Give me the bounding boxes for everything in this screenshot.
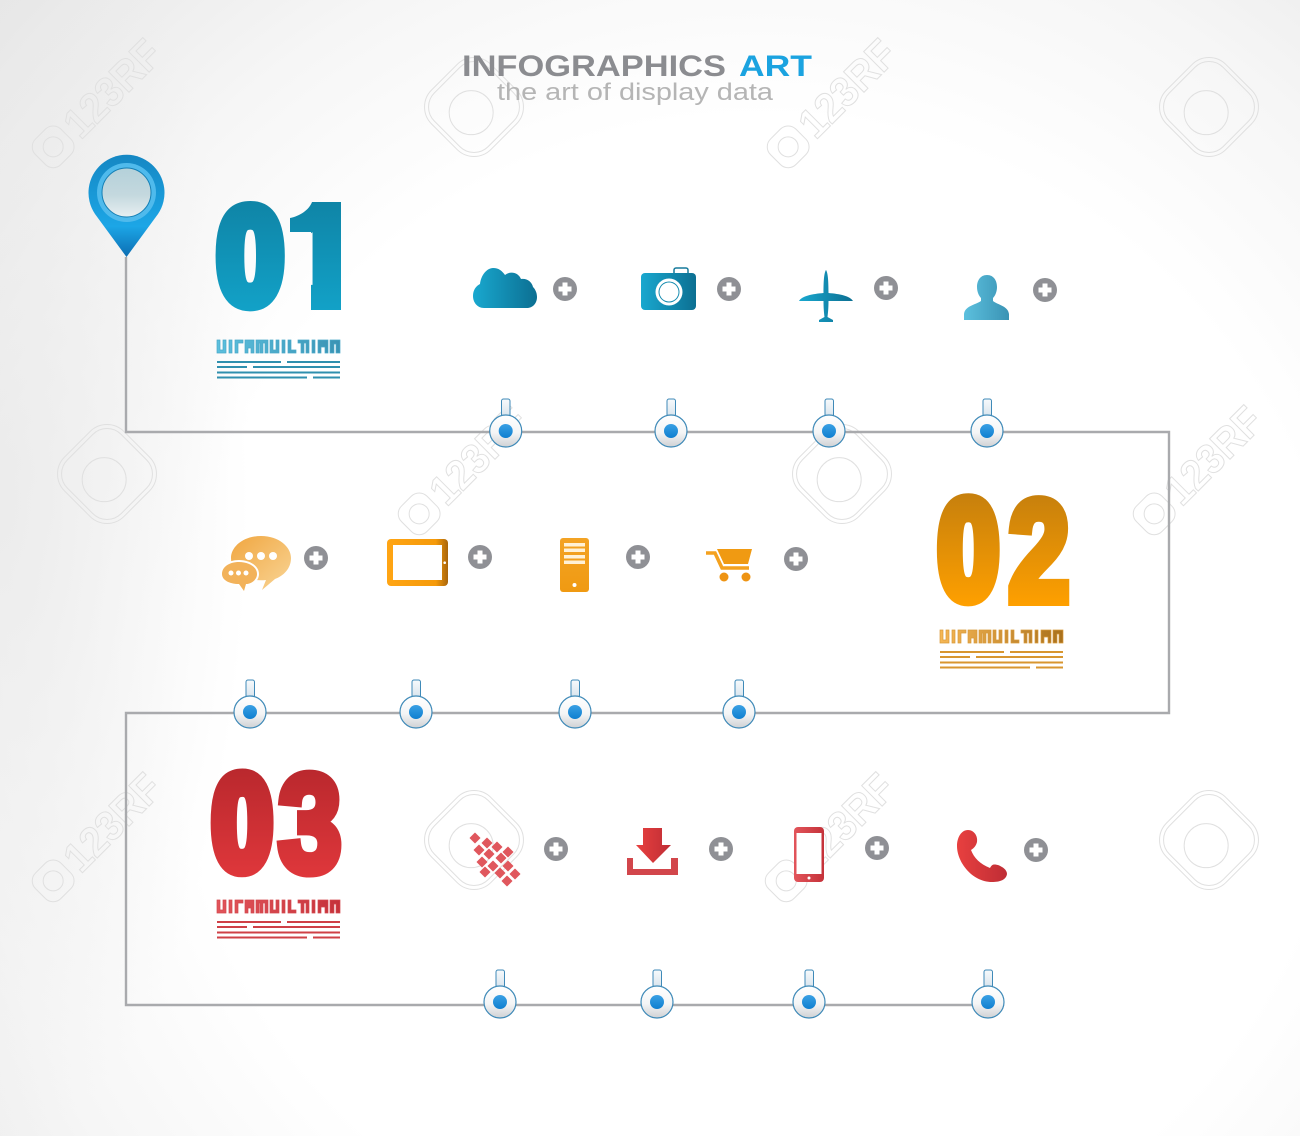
node	[793, 970, 825, 1018]
plus button	[709, 837, 733, 861]
watermark stamps	[24, 30, 1272, 911]
placeholder lines 02	[940, 651, 1063, 668]
placeholder lines 01	[217, 361, 340, 378]
number 01	[216, 201, 341, 312]
watermark stamps: 123RF	[787, 764, 904, 881]
node	[723, 680, 755, 728]
number 02: 0	[938, 471, 999, 628]
plus button	[717, 277, 741, 301]
plus button	[1033, 278, 1057, 302]
icon: cloud	[473, 268, 537, 308]
node	[972, 970, 1004, 1018]
icon: chat bubbles	[220, 536, 291, 593]
watermark stamps: 123RF	[1155, 397, 1272, 514]
subtitle: the art of display data	[497, 79, 774, 106]
plus button	[784, 547, 808, 571]
icon: download	[627, 828, 678, 875]
section 03	[212, 746, 341, 938]
timeline nodes row 2	[234, 680, 755, 728]
node	[655, 399, 687, 447]
section 02	[938, 471, 1069, 668]
icon: server tower	[560, 538, 589, 592]
plus button	[544, 837, 568, 861]
node	[641, 970, 673, 1018]
timeline nodes row 3	[484, 970, 1004, 1018]
map pin	[88, 155, 164, 257]
watermark stamps: 123RF	[420, 397, 537, 514]
watermark stamps: 123RF	[789, 30, 906, 147]
placeholder lines 03	[217, 921, 340, 938]
watermark stamps: 123RF	[54, 30, 171, 147]
icon: smartphone	[794, 827, 824, 882]
watermark stamps: 123RF	[54, 764, 171, 881]
number 03: 3	[278, 746, 341, 901]
title main line: INFOGRAPHICS	[462, 50, 726, 83]
node	[971, 399, 1003, 447]
icon: tablet	[387, 539, 448, 586]
node	[400, 680, 432, 728]
timeline path	[126, 257, 1169, 1005]
placeholder text 02	[940, 630, 1063, 643]
icon: person	[964, 275, 1009, 320]
plus button	[553, 277, 577, 301]
icon: shopping cart	[706, 549, 752, 582]
node	[813, 399, 845, 447]
number 02	[938, 471, 1069, 631]
node	[490, 399, 522, 447]
node	[559, 680, 591, 728]
plus button	[865, 836, 889, 860]
plus button	[468, 545, 492, 569]
section 01	[216, 201, 341, 378]
plus button	[304, 546, 328, 570]
icon: airplane	[799, 270, 853, 322]
number 03: 0	[212, 748, 272, 898]
icon: telephone handset	[957, 830, 1007, 882]
plus button	[626, 545, 650, 569]
plus button	[1024, 838, 1048, 862]
number 03	[212, 746, 341, 901]
node	[484, 970, 516, 1018]
title	[462, 50, 812, 106]
number 02: 2	[1009, 471, 1069, 631]
icon: diamond dots	[470, 833, 520, 886]
number 01: 0	[217, 181, 284, 333]
plus button	[874, 276, 898, 300]
placeholder text 03	[217, 900, 340, 913]
number 01: 1	[284, 173, 366, 338]
placeholder text 01	[217, 340, 340, 353]
node	[234, 680, 266, 728]
timeline nodes row 1	[490, 399, 1003, 447]
title accent word: ART	[739, 50, 812, 83]
icon: camera	[641, 268, 696, 310]
